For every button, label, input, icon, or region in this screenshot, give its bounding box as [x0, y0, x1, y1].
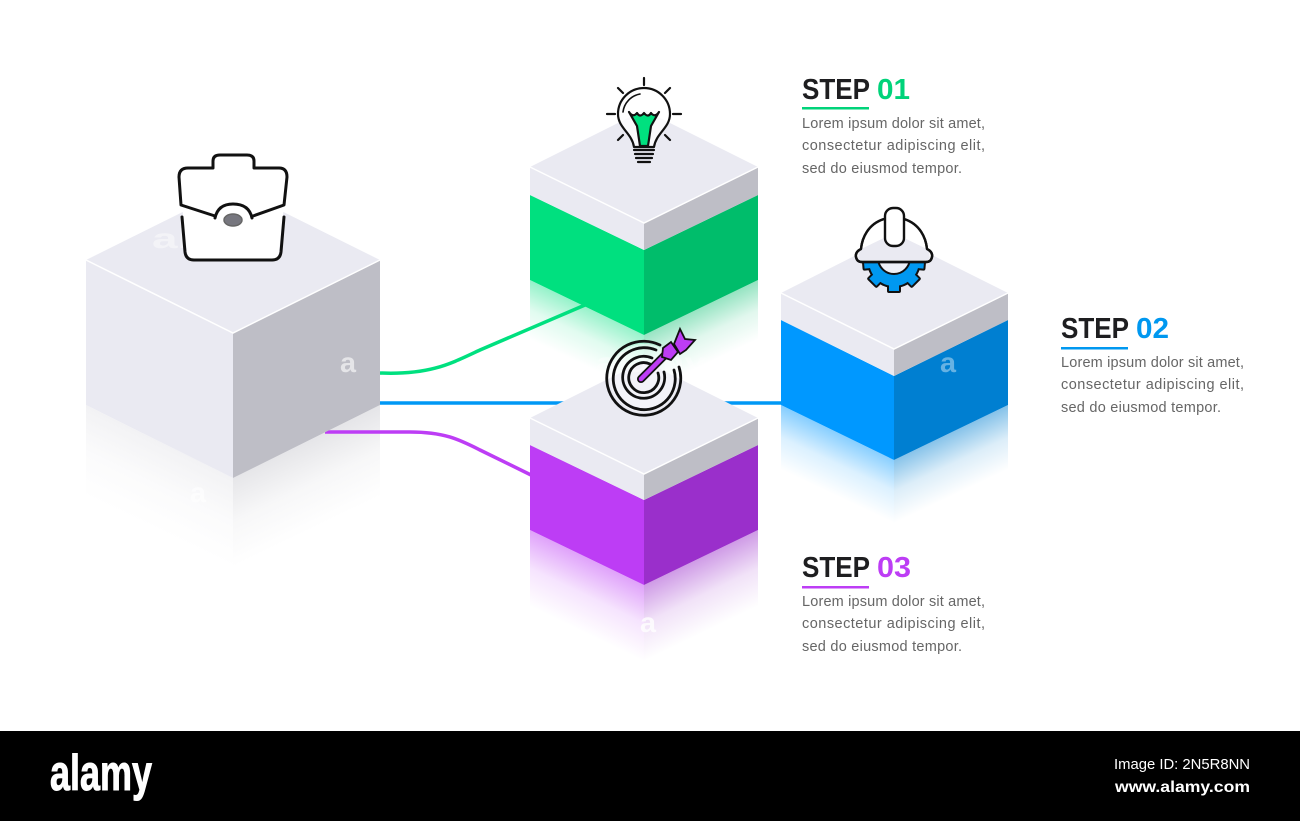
- text block: step 02: consectetur adipiscing elit,: [1061, 377, 1244, 393]
- purple block: [530, 361, 758, 585]
- watermarks: a: [940, 347, 956, 378]
- text block: step 01: sed do eiusmod tempor.: [802, 161, 962, 177]
- text block: step 03: sed do eiusmod tempor.: [802, 639, 962, 655]
- text block: step 03: Lorem ipsum dolor sit amet,: [802, 594, 985, 610]
- text block: step 01: Lorem ipsum dolor sit amet,: [802, 116, 985, 132]
- text block: step 01: consectetur adipiscing elit,: [802, 138, 985, 154]
- icon: briefcase: [179, 155, 287, 260]
- text block: step 01: [802, 74, 985, 177]
- connector: purple: [325, 432, 531, 475]
- text block: step 02: Lorem ipsum dolor sit amet,: [1061, 355, 1244, 371]
- icon: light bulb: [607, 78, 681, 162]
- watermarks: a: [340, 347, 356, 378]
- text block: step 03: consectetur adipiscing elit,: [802, 616, 985, 632]
- text block: step 03: 03: [877, 552, 911, 584]
- footer bar: Image ID: 2N5R8NN: [1114, 756, 1250, 773]
- watermarks: a: [640, 607, 656, 638]
- watermarks: a: [190, 477, 206, 508]
- text block: step 02: 02: [1136, 313, 1169, 345]
- connector: blue: [380, 401, 781, 405]
- connector: green: [380, 305, 585, 373]
- text block: step 03: [802, 552, 985, 655]
- footer bar: alamy: [50, 745, 152, 801]
- blue block: [781, 236, 1008, 460]
- icon: target with arrow: [607, 329, 695, 415]
- green block: [530, 110, 758, 335]
- reflection: green block: [530, 280, 758, 395]
- text block: step 02: STEP: [1061, 313, 1129, 345]
- large cube: [86, 187, 380, 478]
- text block: step 02: [1061, 313, 1244, 416]
- reflection: blue block: [781, 405, 1008, 525]
- reflection: purple block: [530, 530, 758, 662]
- icon: hard hat and gear: [856, 208, 932, 291]
- watermarks: [152, 223, 956, 638]
- text block: step 03: STEP: [802, 552, 870, 584]
- footer bar: www.alamy.com: [1114, 779, 1250, 796]
- watermarks: alamy: [152, 223, 283, 254]
- watermarks: alamy: [596, 347, 707, 378]
- text block: step 02: sed do eiusmod tempor.: [1061, 400, 1221, 416]
- reflection: large cube: [86, 405, 380, 570]
- text block: step 01: 01: [877, 74, 910, 106]
- footer bar: [0, 731, 1300, 821]
- text block: step 01: STEP: [802, 74, 870, 106]
